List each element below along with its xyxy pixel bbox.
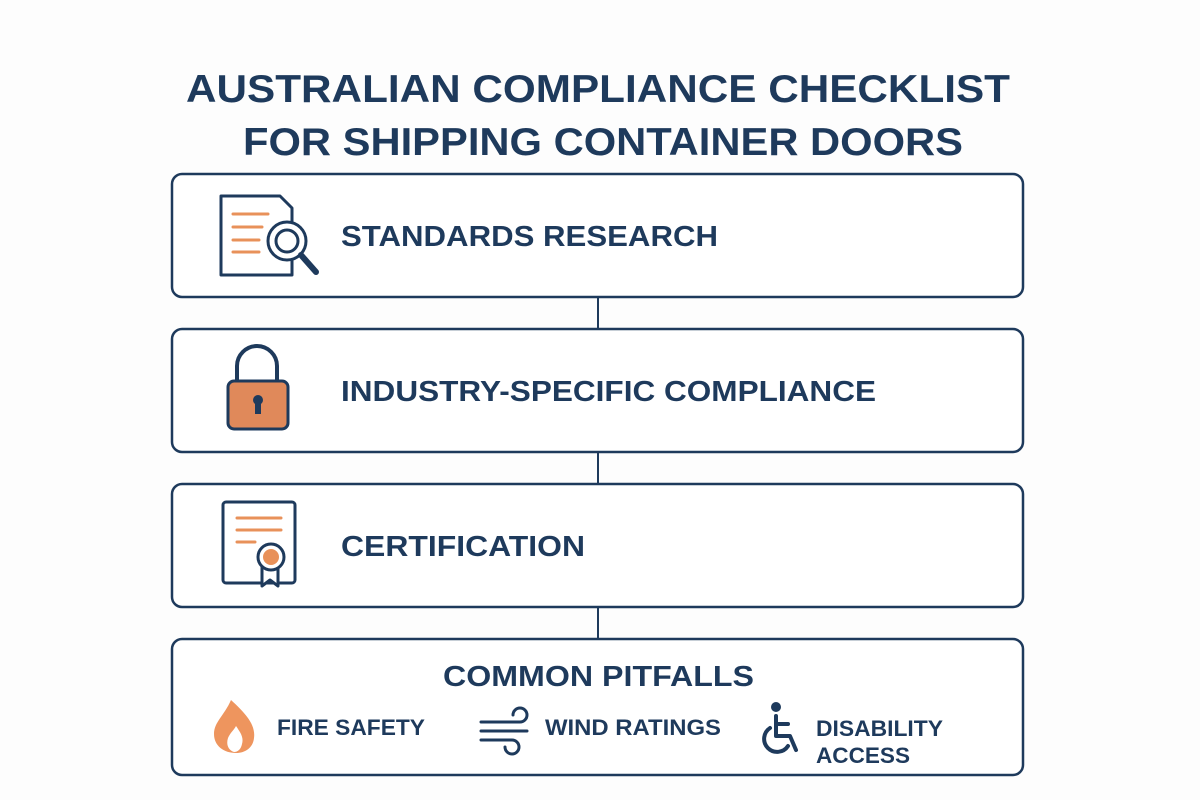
item: fire safety: FIRE SAFETY bbox=[277, 715, 425, 740]
connectors bbox=[597, 297, 599, 639]
heading: CERTIFICATION bbox=[341, 531, 585, 563]
icon: padlock bbox=[228, 346, 288, 429]
heading: INDUSTRY-SPECIFIC COMPLIANCE bbox=[341, 376, 876, 408]
panel: common pitfalls bbox=[172, 639, 1023, 775]
panel: certification bbox=[172, 484, 1023, 607]
heading: COMMON PITFALLS bbox=[443, 661, 754, 693]
title: FOR SHIPPING CONTAINER DOORS bbox=[243, 121, 963, 164]
item: disability access: DISABILITY bbox=[816, 716, 943, 741]
panel: industry-specific compliance bbox=[172, 329, 1023, 452]
panel: standards research bbox=[172, 174, 1023, 297]
item: fire safety bbox=[214, 700, 425, 753]
icon: document with magnifier bbox=[221, 196, 316, 275]
item: disability access: ACCESS bbox=[816, 743, 910, 768]
item: wind ratings: WIND RATINGS bbox=[545, 715, 721, 740]
icon: certificate bbox=[223, 502, 295, 586]
title bbox=[186, 68, 1010, 164]
item: wind ratings bbox=[481, 708, 721, 754]
item: disability access bbox=[764, 702, 943, 768]
heading: STANDARDS RESEARCH bbox=[341, 221, 718, 253]
title: AUSTRALIAN COMPLIANCE CHECKLIST bbox=[186, 68, 1010, 111]
